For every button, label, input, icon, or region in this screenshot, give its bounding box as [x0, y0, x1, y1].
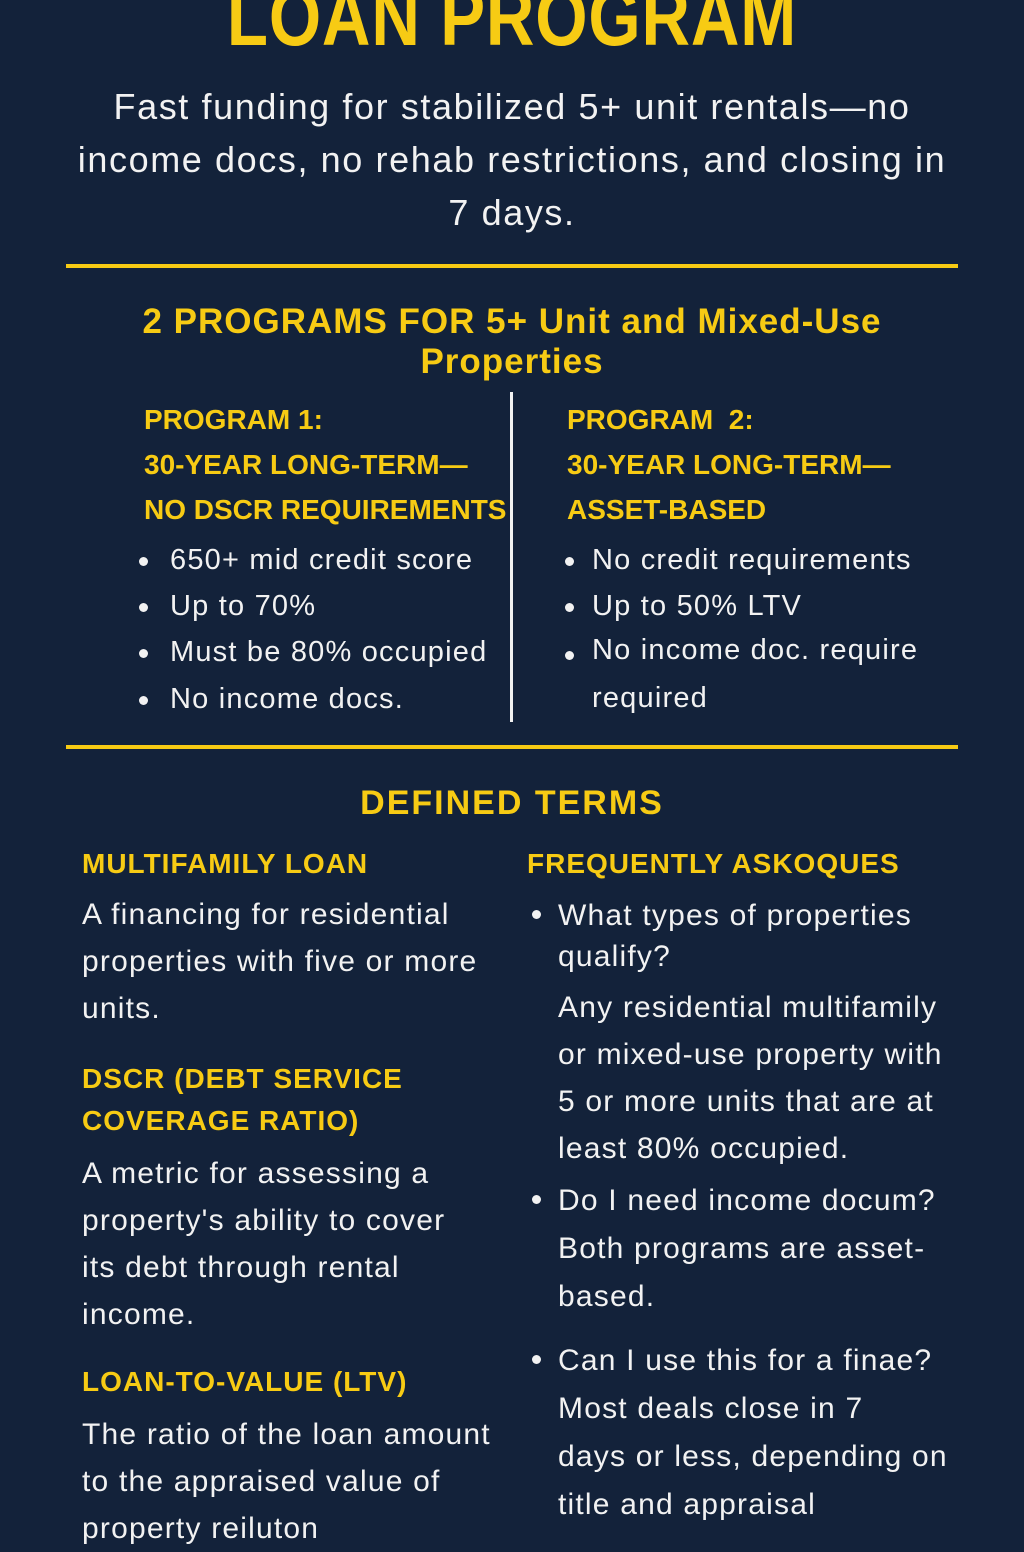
term: multifamily loan: units. [82, 992, 161, 1025]
programs heading: 2 PROGRAMS FOR 5+ Unit and Mixed-Use [142, 302, 882, 341]
term: DSCR: COVERAGE RATIO) [82, 1105, 359, 1136]
programs heading: Properties [420, 342, 604, 381]
FAQ item 3: title and appraisal [558, 1488, 816, 1521]
term: LTV: property reiluton [82, 1512, 319, 1545]
panel: program 1 [139, 404, 506, 715]
FAQ item 3: days or less, depending on [558, 1440, 948, 1473]
panel: FAQ [527, 848, 948, 1521]
term: multifamily loan: A financing for residential [82, 898, 450, 931]
program 1 bullets: Up to 70% [170, 590, 316, 622]
FAQ item 3 [532, 1344, 948, 1521]
program 2 heading [567, 404, 891, 525]
FAQ item 2: Do I need income docum? [558, 1184, 936, 1217]
program 1 heading [144, 404, 506, 525]
defined terms heading: DEFINED TERMS [360, 784, 664, 822]
program 2 bullets: No credit requirements [592, 544, 912, 576]
program 2 bullets [565, 544, 918, 714]
FAQ heading: FREQUENTLY ASKOQUES [527, 848, 900, 879]
term: DSCR: DSCR (DEBT SERVICE [82, 1063, 403, 1094]
term: DSCR [82, 1063, 445, 1331]
program 2 bullets: Up to 50% LTV [592, 590, 802, 622]
term: DSCR: property's ability to cover [82, 1204, 445, 1237]
program 2 bullets: required [592, 682, 708, 714]
subtitle: income docs, no rehab restrictions, and closing in [78, 139, 946, 180]
term: LTV: to the appraised value of [82, 1465, 441, 1498]
program 1 heading: 30-YEAR LONG-TERM— [144, 449, 468, 480]
program 1 bullets: Must be 80% occupied [170, 636, 487, 668]
FAQ item 2 [532, 1184, 936, 1313]
term: LTV: The ratio of the loan amount [82, 1418, 491, 1451]
programs heading [142, 302, 882, 381]
term: DSCR: income. [82, 1298, 195, 1331]
term: LTV: LOAN-TO-VALUE (LTV) [82, 1366, 407, 1397]
FAQ item 3: Can I use this for a finae? [558, 1344, 932, 1377]
program 1 bullets: 650+ mid credit score [170, 544, 473, 576]
program 2 heading: 30-YEAR LONG-TERM— [567, 449, 891, 480]
FAQ item 1: 5 or more units that are at [558, 1085, 934, 1118]
term: DSCR: A metric for assessing a [82, 1157, 429, 1190]
program 2 heading: PROGRAM 2: [567, 404, 754, 435]
program 1 heading: PROGRAM 1: [144, 404, 323, 435]
program 1 heading: NO DSCR REQUIREMENTS [144, 494, 506, 525]
FAQ item 2: based. [558, 1280, 655, 1313]
program 1 bullets: No income docs. [170, 683, 404, 715]
FAQ item 1: qualify? [558, 940, 671, 973]
FAQ item 1: What types of properties [558, 899, 912, 932]
FAQ item 1: Any residential multifamily [558, 991, 937, 1024]
program 2 bullets: No income doc. require [592, 634, 918, 666]
subtitle: Fast funding for stabilized 5+ unit rentals—no [113, 86, 910, 127]
FAQ item 3: Most deals close in 7 [558, 1392, 863, 1425]
FAQ item 1: least 80% occupied. [558, 1132, 849, 1165]
term: DSCR: its debt through rental [82, 1251, 400, 1284]
FAQ item 1: or mixed-use property with [558, 1038, 943, 1071]
subtitle: 7 days. [448, 192, 576, 233]
program 1 bullets [139, 544, 487, 715]
term: multifamily loan [82, 848, 477, 1025]
FAQ item 1 [532, 899, 943, 1165]
program 2 heading: ASSET-BASED [567, 494, 766, 525]
term: multifamily loan: properties with five or more [82, 945, 477, 978]
panel: definitions [82, 848, 491, 1545]
FAQ item 2: Both programs are asset- [558, 1232, 925, 1265]
term: multifamily loan: MULTIFAMILY LOAN [82, 848, 368, 879]
panel: program 2 [565, 404, 918, 714]
term: LTV [82, 1366, 491, 1545]
subtitle [78, 86, 946, 233]
